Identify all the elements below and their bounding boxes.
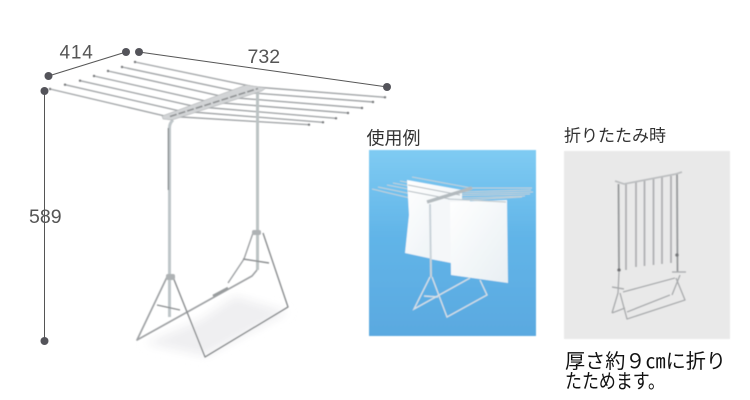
caption: folds to about 9 cm thick [565, 350, 726, 393]
joints [166, 274, 175, 280]
top cross bar [162, 85, 266, 120]
rack rods in photo [372, 177, 533, 202]
folded posts [618, 173, 678, 272]
panel: usage example photo [369, 150, 536, 336]
rods over towel [408, 185, 460, 199]
left post [170, 120, 173, 317]
panel: folded rack photo [564, 151, 730, 339]
right post [256, 92, 259, 270]
top bar in photo [427, 188, 472, 202]
depth dimension: 414 [44, 42, 130, 80]
caption: folds to about 9 cm thick: 厚さ約９㎝に折り [565, 350, 726, 373]
frame in photo [414, 204, 487, 317]
folded top bar [615, 172, 682, 184]
hanging rods [50, 62, 385, 125]
rod end caps [49, 61, 386, 126]
floor shadow [145, 296, 288, 356]
towel left [405, 180, 462, 264]
folded rods [626, 176, 671, 270]
caption: folds to about 9 cm thick: たためます。 [565, 371, 665, 393]
width dimension: 732 [135, 46, 391, 91]
width dimension: 732: 732 [248, 46, 280, 68]
main drying rack product [49, 61, 386, 357]
base frame [137, 233, 288, 357]
heading: usage example: 使用例 [366, 128, 420, 148]
height dimension: 589: 589 [29, 206, 62, 228]
depth dimension: 414: 414 [60, 42, 94, 64]
towel right [450, 200, 508, 283]
heading: when folded: 折りたたみ時 [564, 126, 666, 146]
folded base [612, 272, 686, 319]
height dimension: 589 [29, 87, 62, 345]
